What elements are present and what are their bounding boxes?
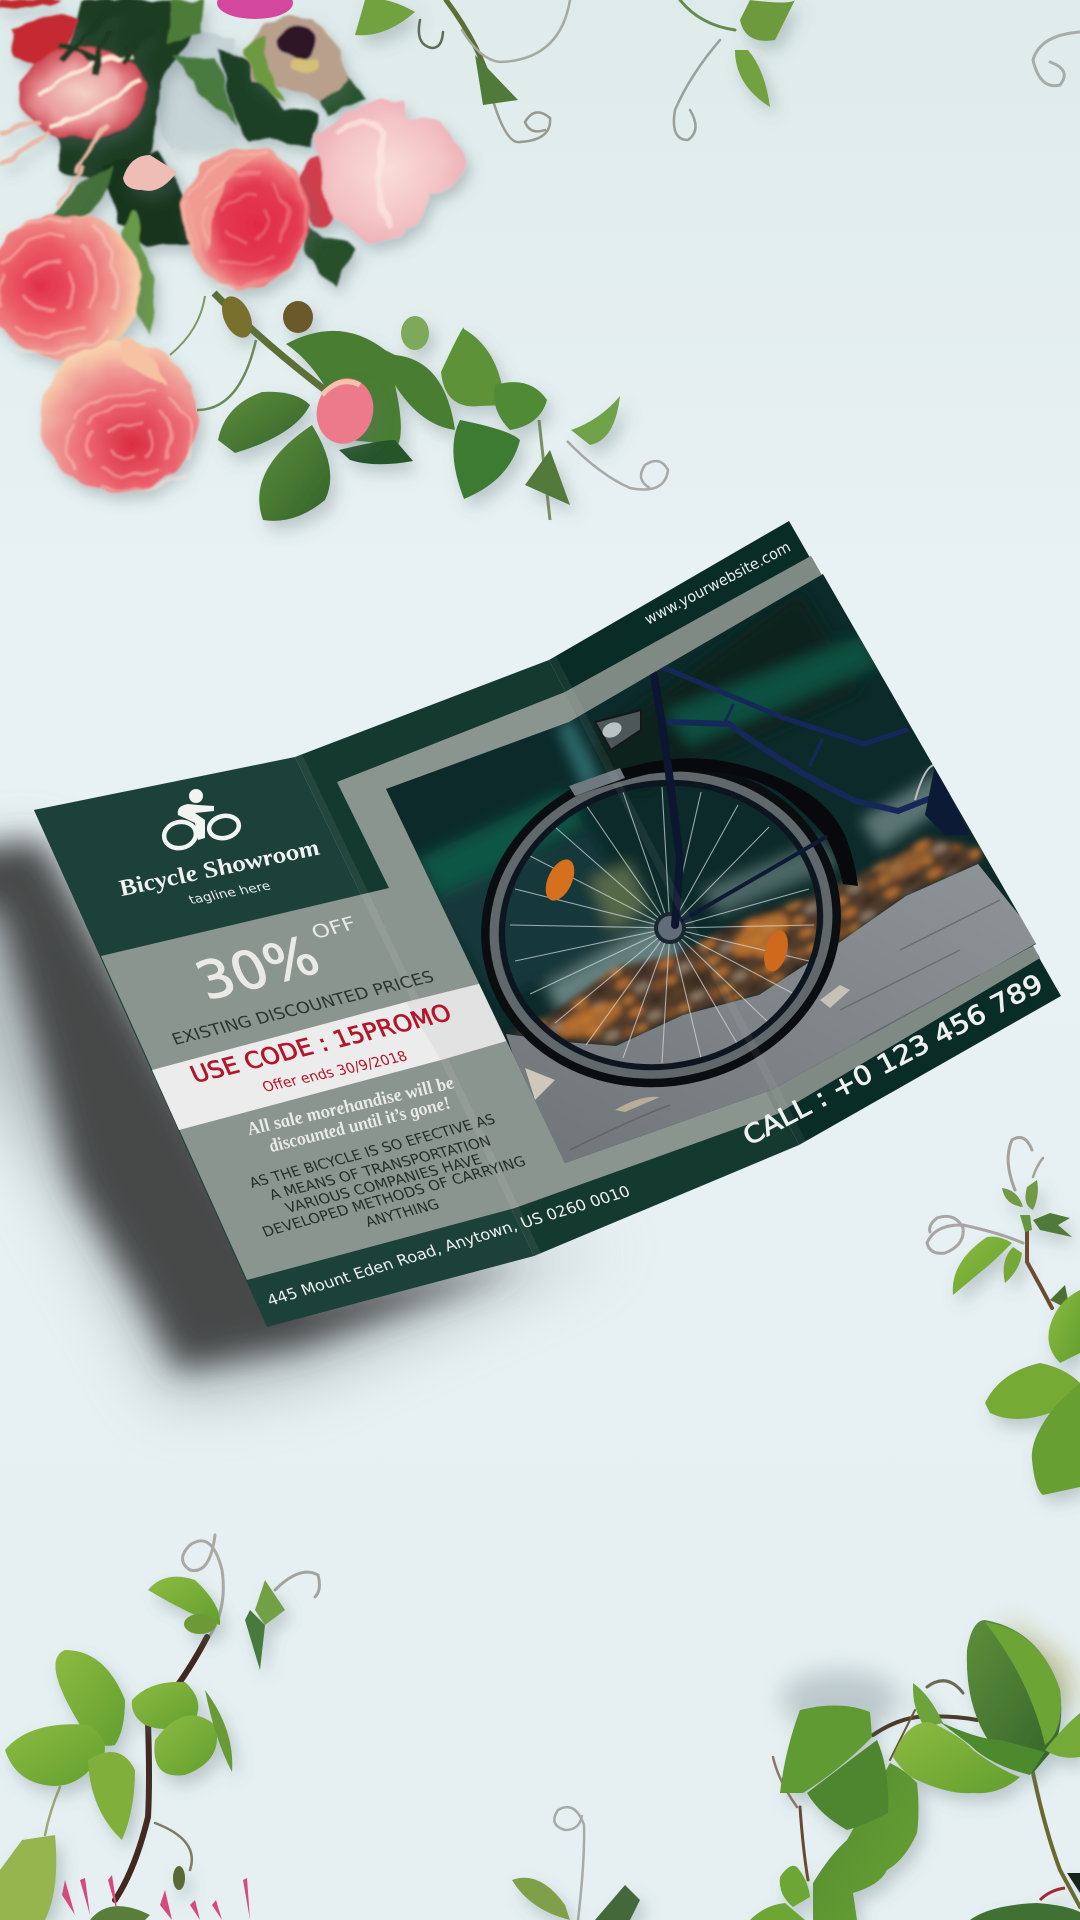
body copy: DEVELOPED METHODS OF CARRYING [260, 1154, 529, 1241]
wheel spokes [510, 787, 814, 1063]
autumn leaves [506, 837, 982, 1046]
panel: grey layout block [101, 556, 1040, 1280]
body copy: ANYTHING [363, 1197, 442, 1231]
wheel tyre and rim [481, 767, 841, 1088]
red rose [182, 148, 308, 288]
top vine [355, 0, 570, 142]
vine and leaves: bottom left [0, 1535, 319, 1920]
pink peony [298, 100, 463, 242]
discount: 30 percent: 30% [186, 925, 329, 1012]
address: 445 Mount Eden Road, Anytown, US 0260 0010 [264, 1182, 633, 1310]
brand name: Bicycle Showroom [113, 836, 324, 902]
blurred green hedge [415, 590, 955, 1015]
top left rose [0, 0, 150, 205]
promo code band [152, 984, 506, 1130]
existing discounted prices: EXISTING DISCOUNTED PRICES [169, 967, 437, 1049]
tagline: tagline here [186, 878, 273, 907]
hub [656, 914, 684, 942]
sale note: discounted until it’s gone! [265, 1093, 455, 1157]
website text: www.yourwebsite.com [642, 538, 794, 629]
vine: top right [674, 0, 1080, 140]
orange rose [0, 212, 141, 362]
bicycle lamp [595, 710, 641, 750]
tri-fold brochure [34, 521, 1061, 1327]
fold shading [295, 656, 806, 1256]
reflectors [540, 855, 792, 974]
flower arrangement: top left [0, 0, 668, 521]
brochure cast shadow [0, 805, 620, 1400]
discount: off label: OFF [308, 913, 360, 944]
photo: bicycle wheel [380, 570, 1050, 1170]
branch leaves [216, 292, 620, 521]
sale note: All sale morehandise will be [243, 1073, 458, 1140]
pavement [506, 864, 1040, 1170]
icon: cyclist [162, 789, 241, 851]
pink spiky flower [62, 1875, 250, 1920]
rose bud on branch [309, 372, 381, 450]
promo code: USE CODE : 15PROMO [186, 999, 456, 1088]
leaves: bottom right [750, 1610, 1080, 1920]
dark foliage [40, 0, 365, 335]
body copy: VARIOUS COMPANIES HAVE [283, 1152, 484, 1217]
light small bud [123, 155, 177, 191]
body copy: AS THE BICYCLE IS SO EFECTIVE AS [247, 1112, 498, 1192]
panel: right dark base [549, 521, 1061, 1145]
bottom rose [42, 338, 198, 493]
grey tone: right panel band [565, 556, 1040, 1114]
body copy: A MEANS OF TRANSPORTATION [267, 1134, 494, 1204]
bicycle frame [654, 667, 944, 925]
vine: bottom centre [512, 1807, 640, 1920]
photo backdrop [380, 570, 1050, 1170]
offer date: Offer ends 30/9/2018 [260, 1049, 410, 1096]
panel: left dark base [34, 757, 534, 1327]
body copy [247, 1112, 529, 1241]
mudguard [569, 758, 858, 886]
beige tulip [245, 18, 348, 100]
branch stems and tendrils [170, 293, 668, 520]
magenta flower [217, 0, 293, 19]
panel: middle dark base [295, 660, 799, 1256]
pale cast shadow between flowers [150, 20, 240, 150]
rear wheel and bag [915, 765, 970, 835]
phone number: CALL : +0 123 456 789 [738, 969, 1048, 1152]
vine and leaves: middle right [927, 1138, 1080, 1495]
